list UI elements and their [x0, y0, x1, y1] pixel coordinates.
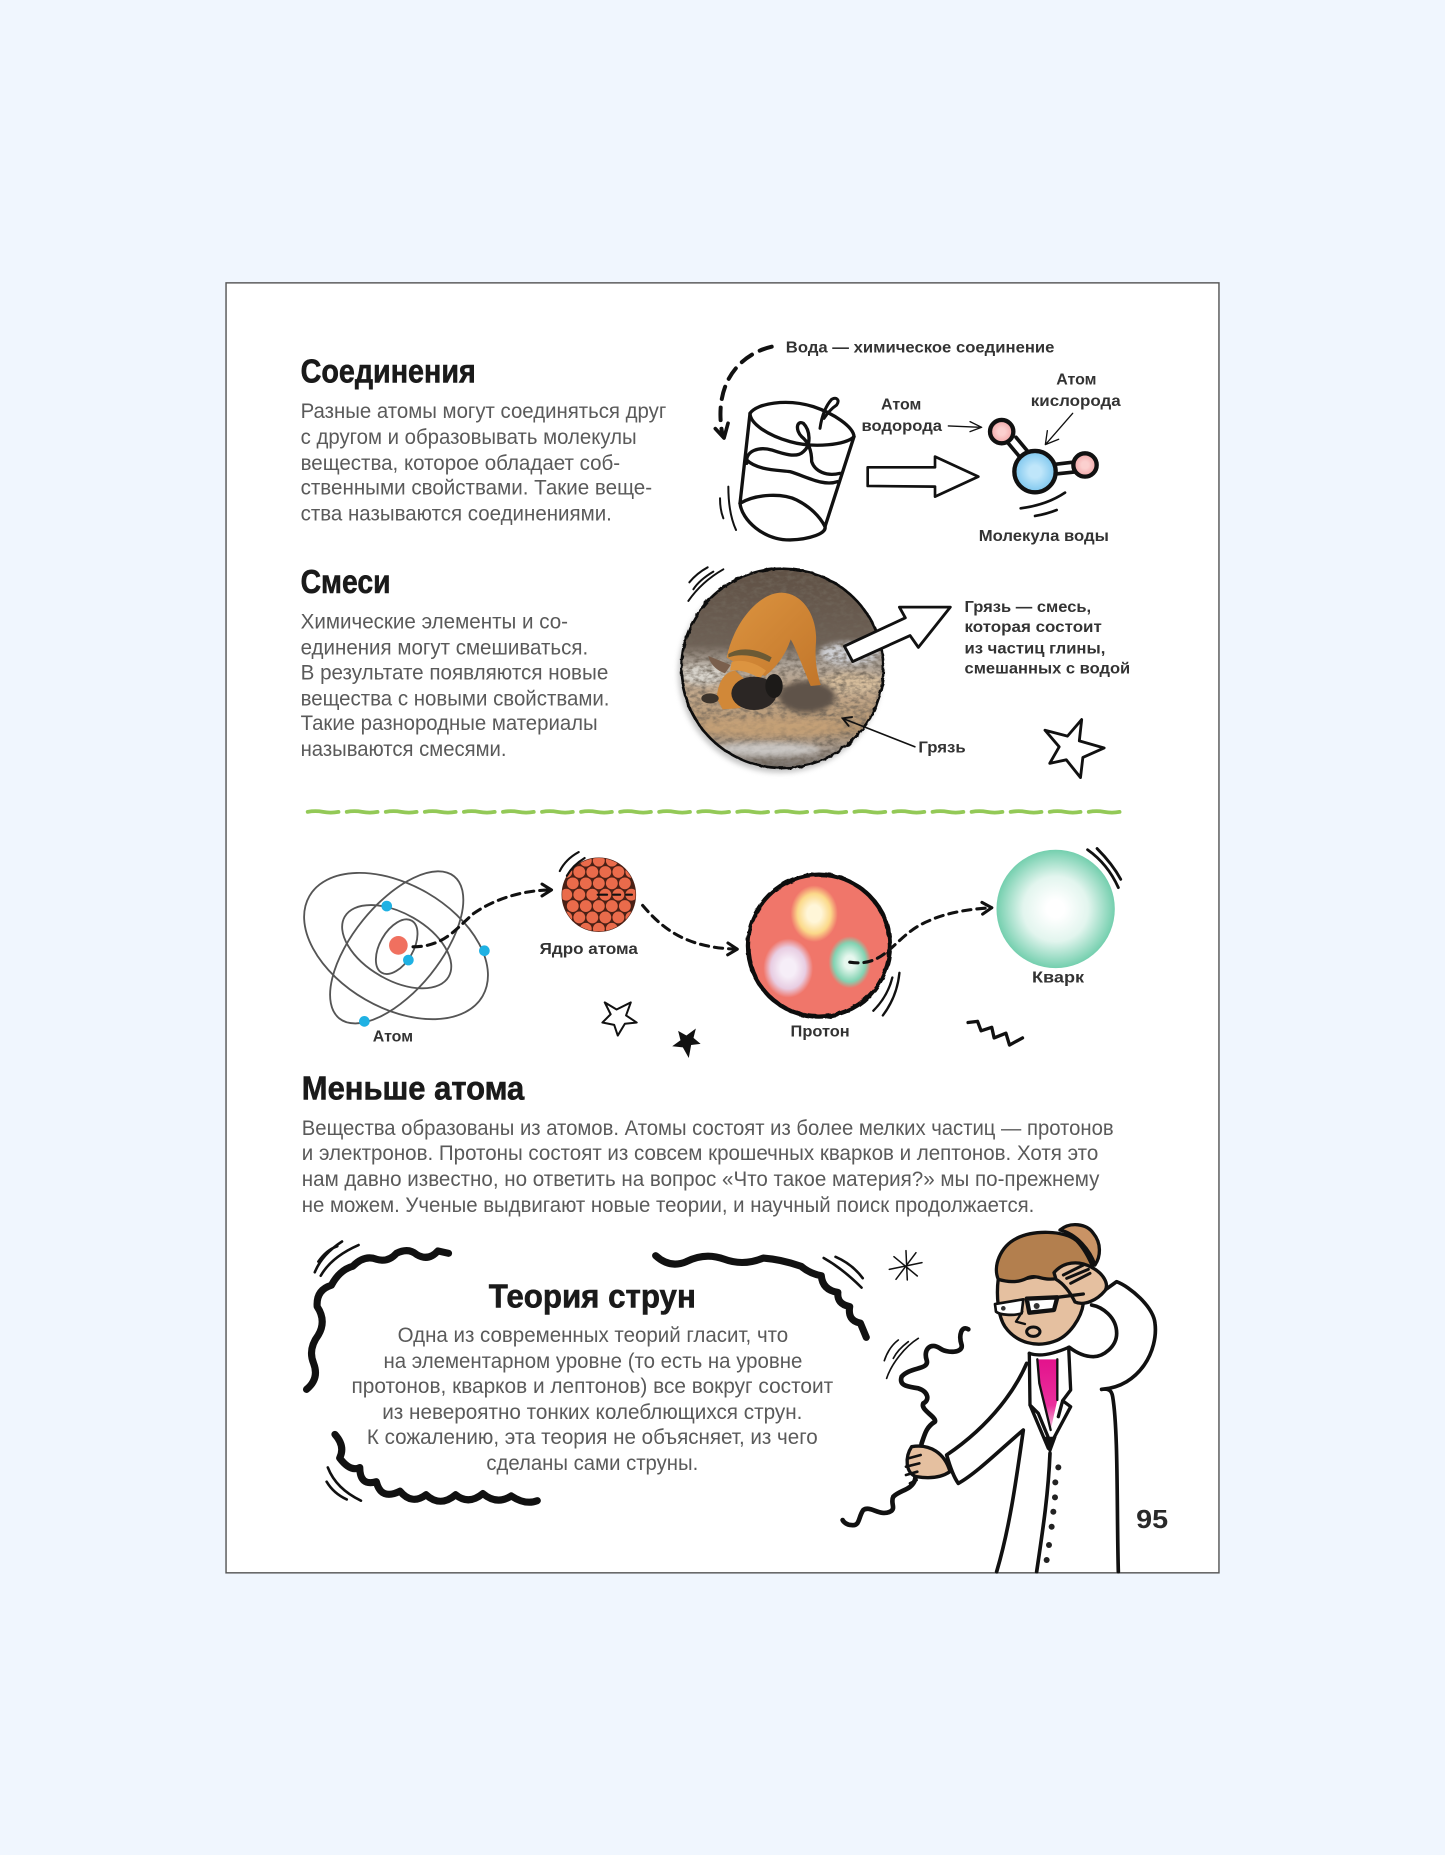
body text: smaller than an atom: не можем. Ученые выдвигают новые теории, и научный поиск продолжается. [302, 1193, 1034, 1217]
icon: small outline star [602, 1002, 637, 1036]
wavy frame top right [656, 1256, 866, 1337]
callout text: mud is a mixture: из частиц глины, [965, 640, 1105, 657]
body text: compounds: с другом и образовывать молекулы [301, 425, 637, 449]
photo: dog in the mud [677, 567, 890, 773]
icon: quark [996, 849, 1121, 968]
labels: hydrogen atom: водорода [862, 418, 942, 435]
body text: string theory: К сожалению, эта теория не объясняет, из чего [367, 1425, 818, 1449]
labels: oxygen atom: Атом [1056, 372, 1097, 389]
label: nucleus: Ядро атома [540, 941, 638, 958]
labels: hydrogen atom [862, 397, 942, 435]
wavy frame top left [307, 1241, 449, 1389]
icon: water molecule [990, 420, 1097, 516]
body text: string theory [351, 1323, 833, 1475]
section: mixtures text [301, 564, 609, 761]
wavy frame bottom left [327, 1434, 537, 1502]
body text: smaller than an atom: нам давно известно, но ответить на вопрос «Что такое материя?» мы по-прежнему [302, 1167, 1100, 1191]
icon: atomic nucleus [560, 852, 637, 935]
label: water molecule: Молекула воды [979, 528, 1109, 545]
label: mud: Грязь [918, 740, 966, 757]
body text: string theory: на элементарном уровне (то есть на уровне [383, 1349, 802, 1373]
book page [226, 283, 1219, 1573]
body text: mixtures: Такие разнородные материалы [301, 711, 598, 735]
green wavy divider [308, 811, 1120, 813]
body text: compounds: Разные атомы могут соединяться друг [301, 399, 667, 423]
arrow to mud [843, 718, 915, 747]
labels: hydrogen atom: Атом [881, 397, 921, 414]
icon: large star [1045, 720, 1104, 778]
panel: string theory [307, 1241, 866, 1502]
callout text: mud is a mixture: которая состоит [965, 619, 1102, 636]
heading: string theory: Теория струн [489, 1279, 696, 1316]
callout text: mud is a mixture [965, 599, 1130, 677]
hand holding string [906, 1446, 950, 1483]
body text: mixtures: единения могут смешиваться. [301, 635, 588, 659]
dashed arrow to glass [715, 347, 772, 438]
labels: oxygen atom [1031, 372, 1121, 410]
scientist head [995, 1225, 1106, 1344]
label: proton: Протон [791, 1024, 850, 1041]
body text: string theory: из невероятно тонких колеблющихся струн. [382, 1400, 802, 1424]
callout text: mud is a mixture: смешанных с водой [965, 660, 1130, 677]
icon: proton [748, 875, 899, 1017]
raised arm [1069, 1282, 1155, 1389]
icon: small filled star [672, 1028, 701, 1058]
callout text: mud is a mixture: Грязь — смесь, [965, 599, 1091, 616]
body text: mixtures: Химические элементы и со- [301, 609, 568, 633]
hollow arrow [868, 457, 978, 497]
lab coat [947, 1347, 1118, 1572]
body text: smaller than an atom: Вещества образованы из атомов. Атомы состоят из более мелких частиц — протонов [302, 1116, 1114, 1140]
body text: smaller than an atom: и электронов. Протоны состоят из совсем крошечных кварков и лептонов. Хотя это [302, 1141, 1098, 1165]
dashed arrow: proton to quark [850, 908, 992, 963]
diagram: atom to quark [279, 843, 1121, 1058]
body text: smaller than an atom [302, 1116, 1114, 1217]
illustration: scientist holding a string [843, 1225, 1155, 1572]
body text: string theory: сделаны сами струны. [486, 1451, 698, 1475]
coat buttons [1044, 1464, 1061, 1563]
body text: compounds: ственными свойствами. Такие веще- [301, 476, 652, 500]
diagram: water is a chemical compound [715, 340, 1121, 545]
body text: string theory: Одна из современных теорий гласит, что [398, 1323, 788, 1347]
body text: mixtures: называются смесями. [301, 737, 507, 761]
wavy string [843, 1328, 968, 1525]
heading: compounds: Соединения [301, 353, 476, 390]
body text: compounds [301, 399, 667, 526]
traced water drawing [715, 347, 1097, 540]
body text: mixtures: В результате появляются новые [301, 660, 608, 684]
section: compounds text [301, 353, 667, 526]
icon: glass of water [720, 398, 854, 540]
arrow to oxygen [1045, 413, 1073, 445]
heading: smaller than an atom: Меньше атома [302, 1070, 525, 1107]
section: smaller than an atom [302, 1070, 1114, 1217]
label: water: Вода — химическое соединение [786, 340, 1055, 357]
body text: mixtures: вещества с новыми свойствами. [301, 686, 609, 710]
dashed arrow: nucleus to proton [643, 905, 737, 949]
body text: mixtures [301, 609, 609, 761]
label: atom: Атом [373, 1028, 413, 1045]
heading: mixtures: Смеси [301, 564, 391, 601]
icon: atom [279, 843, 513, 1049]
dashed arrow: atom to nucleus [413, 890, 551, 947]
arrow to hydrogen [948, 422, 982, 432]
body text: string theory: протонов, кварков и лептонов) все вокруг состоит [351, 1374, 833, 1398]
page number: 95 [1136, 1504, 1168, 1534]
labels: oxygen atom: кислорода [1031, 393, 1121, 410]
body text: compounds: вещества, которое обладает соб- [301, 451, 620, 475]
label: quark: Кварк [1032, 969, 1084, 986]
icon: asterisk [889, 1251, 922, 1280]
icon: zigzag [968, 1021, 1023, 1045]
body text: compounds: ства называются соединениями. [301, 502, 612, 526]
infographic page [225, 282, 1220, 1574]
callout arrow from photo [844, 607, 950, 662]
